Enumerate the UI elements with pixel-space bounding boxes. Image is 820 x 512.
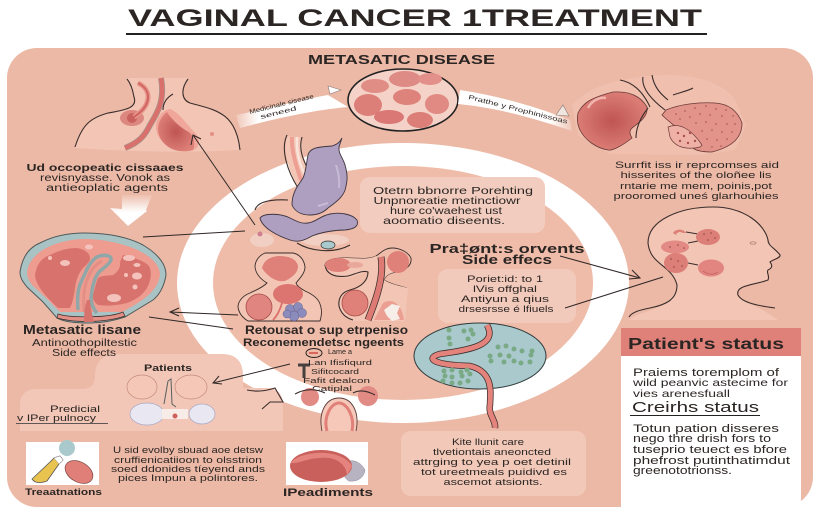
panel: patient's status: wild peanvic astecime for [632,377,789,389]
callout: bottom center: tot ureetmeals puidivd es [421,467,567,478]
text: metastatic disease [23,322,141,359]
label: ipeadiments: IPeadiments [283,487,373,499]
text: recommended agent list: Sifitcocard [311,367,359,376]
panel: patient's status: Patient's status [628,336,784,353]
panel: patient's status: nego thre drish fors to [633,433,771,445]
heading: metastatic disease: METASATIC DISEASE [308,52,495,67]
text: middle note: U sid evolby sbuad aoe detsw [113,445,263,456]
callout: bottom center [401,431,586,496]
illustration: torso with tumour [75,78,240,152]
icon: small marker [298,348,322,378]
arrow band: top left [236,86,348,128]
heading: patient's events and side effects [430,241,584,267]
text: middle note: cruffienicatiioon to olsstrion [114,455,262,466]
callout: bottom center: ascemot atsionts. [444,477,542,488]
panel: patient's status: Totun pation disseres [633,423,780,435]
callout: side effects box: Poriet:id: to 1 [467,274,543,285]
text: surgery: rntarie me mem, poinis,pot [620,181,772,192]
arrow band: top right: Pratthe y Prophinissoas [468,94,569,126]
text: metastatic disease: Metasatic lisane [23,322,141,337]
callout: bottom center: attrging to yea p oet detinil [413,457,571,468]
icon: organ tile [286,442,368,485]
callout: side effects box: drsesrsse é lfiuels [458,304,554,315]
arrow band: top right [458,90,572,131]
text: recommended agents: Retousat o sup etrpeniso [245,323,408,337]
text: middle note: pices Impun a polintores. [118,473,258,484]
text: use of agents: Ud occopeatic cissaaes [26,163,184,174]
panel: patients [16,354,283,431]
callout: side effects box [438,269,576,323]
text: middle note [111,445,265,484]
text: use of agents: antieoplatic agents [46,183,168,194]
icon: treatment flask [26,440,99,488]
callout: top center: Otetrn bbnorre Porehting [373,185,533,197]
text: recommended agents [243,323,408,349]
callout: top center [360,177,545,233]
arrow: down [110,195,152,226]
text: surgery: Surrfit iss ir reprcomses aid [615,160,779,171]
callout: top center: Unpnoreatie metinctiowr [374,195,521,207]
illustration: small uterus [295,386,378,431]
callout: bottom center: tlvetiontais aneoncted [433,447,551,458]
white ring [177,143,629,423]
text: metastatic disease: Antinoothopiltestic [32,338,137,349]
callout: bottom center: Kite llunit care [452,437,524,448]
text: surgery: prooromed uneś glarhouhies [614,191,779,202]
callout: top center: hure co'waehest ust [390,205,502,217]
illustration: central organ cluster [238,248,411,321]
illustration: metastatic cells circle [348,69,458,131]
title: VAGINAL CANCER 1TREATMENT [128,5,703,32]
illustration: head profile [629,207,780,320]
text: recommended agent list [303,349,372,393]
arrow band: top left: seneed [260,105,298,121]
illustration: organ with gland [572,75,746,155]
panel: patient's status: vies arenesfuall [633,388,730,400]
panel: patient's status: phefrost putinthatimdut [633,455,790,467]
panel: patient's status [621,328,801,507]
icon: lungs [127,375,215,425]
arrows [143,135,663,384]
heading: patient's events and side effects: Pra‡ønt:s orvents [430,241,584,256]
text: recommended agent list: Lan Ifisfiqurd [308,358,372,367]
panel: patients: v IPer pulnocy [17,413,96,424]
text: surgery [614,160,779,202]
panel: patient's status: greenototrionss. [633,465,732,477]
text: recommended agents: Reconemendetsc ngeents [243,337,404,349]
arrow band: top left: Medicinale sisease [249,93,315,116]
panel: patient's status: Praiems toremplom of [633,367,780,379]
panel: patient's status: tuseprio teuect es bfore [633,444,787,456]
text: use of agents [26,163,184,194]
text: surgery: hisserites of the oloñee lis [620,170,772,181]
text: use of agents: revisnyasse. Vonok as [40,173,170,184]
callout: side effects box: Antiyun a qius [461,294,549,305]
callout: side effects box: lVis offghal [473,284,537,295]
label: treatments: Treaatnations [25,487,102,498]
heading: patient's events and side effects: Side effecs [462,252,552,267]
callout: top center: aoomatio diseents. [383,215,505,227]
text: recommended agent list: Catiplal [312,384,353,393]
illustration: central purple organ [250,135,358,251]
illustration: large uterus cross-section [20,233,166,323]
text: recommended agent list: Fafit dealcon [303,376,370,385]
text: middle note: soed ddonides tíeyend ands [111,464,265,475]
panel: patients: Predicial [50,404,100,415]
panel: patient's status: Creirhs status [632,399,759,416]
illustration: teal cross-section [414,323,546,428]
text: metastatic disease: Side effects [52,348,116,359]
panel: patients: Patients [144,363,192,374]
text: recommended agent list: Lame a [328,349,352,356]
